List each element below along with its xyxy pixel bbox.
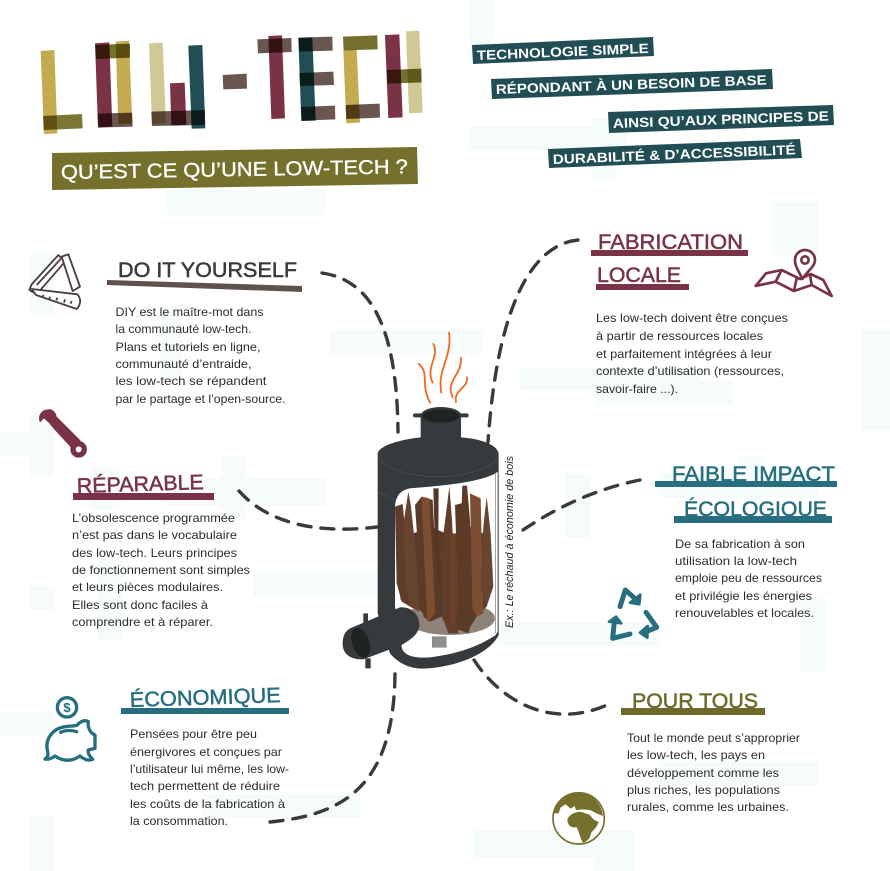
icon: map pin bbox=[756, 250, 832, 296]
text block: impact: renouvelables et locales. bbox=[675, 607, 814, 620]
text block: impact: utilisation la low-tech bbox=[675, 555, 797, 568]
stove body bbox=[378, 437, 499, 669]
stove illustration bbox=[343, 333, 499, 669]
text block: fabrication: Les low-tech doivent être conçues bbox=[596, 312, 788, 325]
text block: diy bbox=[116, 306, 286, 406]
text block: pour tous: Tout le monde peut s’approprier bbox=[627, 732, 800, 745]
text block: réparable: Elles sont donc faciles à bbox=[72, 599, 209, 612]
panel: fabrication locale: LOCALE bbox=[597, 264, 681, 287]
definition banners: RÉPONDANT À UN BESOIN DE BASE bbox=[496, 73, 767, 97]
panel: faible impact écologique: ÉCOLOGIQUE bbox=[684, 498, 827, 521]
icon: recycling bbox=[609, 590, 657, 638]
text block: pour tous: plus riches, les populations bbox=[627, 784, 780, 797]
text block: fabrication bbox=[596, 312, 788, 396]
title: LOW-TECH built from bars bbox=[41, 31, 423, 134]
icon: globe bbox=[553, 793, 604, 844]
text block: pour tous: développement comme les bbox=[627, 767, 779, 780]
text block: impact: et privilégie les énergies bbox=[675, 590, 812, 603]
definition banners bbox=[472, 37, 834, 168]
panel: pour tous: POUR TOUS bbox=[632, 690, 758, 713]
text block: impact: De sa fabrication à son bbox=[675, 538, 805, 551]
panel: fabrication locale: FABRICATION bbox=[598, 231, 743, 254]
text block: économique bbox=[130, 728, 289, 828]
panel: réparable bbox=[72, 471, 250, 629]
text block: fabrication: et parfaitement intégrées à leur bbox=[596, 348, 772, 361]
text block: économique: l’utilisateur lui même, les low- bbox=[130, 763, 289, 776]
icon: flames bbox=[419, 333, 467, 403]
text block: réparable: et leurs pièces modulaires. bbox=[72, 581, 223, 594]
panel: faible impact écologique bbox=[655, 463, 837, 620]
text block: impact bbox=[675, 538, 822, 620]
text block: pour tous: les low-tech, les pays en bbox=[627, 749, 765, 762]
burner plate bbox=[405, 602, 495, 635]
text block: réparable bbox=[72, 512, 250, 629]
caption: stove: Ex.: Le réchaud à économie de bois bbox=[504, 456, 516, 628]
text block: diy: les low-tech se répandent bbox=[116, 375, 267, 388]
text block: fabrication: savoir-faire ...). bbox=[596, 383, 678, 396]
dashed connectors bbox=[239, 240, 640, 822]
icon: tools bbox=[29, 254, 80, 309]
text block: réparable: L’obsolescence programmée bbox=[72, 512, 235, 525]
icon: piggy bank: $ bbox=[63, 700, 71, 715]
text block: diy: Plans et tutoriels en ligne, bbox=[116, 341, 260, 354]
definition banners: TECHNOLOGIE SIMPLE bbox=[476, 41, 649, 63]
text block: fabrication: contexte d’utilisation (ressources, bbox=[596, 365, 784, 378]
text block: réparable: des low-tech. Leurs principes bbox=[72, 547, 237, 560]
air intake tube bbox=[363, 613, 371, 668]
text block: pour tous: rurales, comme les urbaines. bbox=[627, 801, 789, 814]
icon: piggy bank bbox=[45, 698, 95, 760]
heading banner: qu'est ce qu'une low-tech: QU’EST CE QU’UNE LOW-TECH ? bbox=[61, 156, 408, 184]
text block: économique: énergivores et conçues par bbox=[130, 746, 282, 759]
icon: wrench bbox=[39, 409, 84, 455]
text block: réparable: de fonctionnement sont simples bbox=[72, 564, 250, 577]
panel: pour tous bbox=[621, 690, 800, 814]
wood logs bbox=[395, 486, 493, 633]
chimney bbox=[421, 415, 461, 456]
text block: impact: emploie peu de ressources bbox=[675, 572, 822, 585]
panel: do it yourself: DO IT YOURSELF bbox=[118, 259, 297, 282]
text block: économique: la consommation. bbox=[130, 815, 228, 828]
text block: diy: la communauté low-tech. bbox=[116, 323, 252, 336]
text block: diy: DIY est le maître-mot dans bbox=[116, 306, 264, 319]
text block: économique: les coûts de la fabrication à bbox=[130, 798, 286, 811]
text block: diy: communauté d’entraide, bbox=[116, 358, 252, 371]
text block: fabrication: à partir de ressources locales bbox=[596, 330, 763, 343]
panel: économique bbox=[121, 684, 289, 828]
definition banners: DURABILITÉ & D’ACCESSIBILITÉ bbox=[553, 142, 796, 167]
text block: diy: par le partage et l’open-source. bbox=[116, 393, 286, 406]
text block: réparable: comprendre et à réparer. bbox=[72, 616, 213, 629]
panel: économique: ÉCONOMIQUE bbox=[129, 684, 281, 712]
definition banners: AINSI QU’AUX PRINCIPES DE bbox=[613, 108, 829, 131]
panel: fabrication locale bbox=[591, 231, 788, 396]
panel: réparable: RÉPARABLE bbox=[76, 471, 204, 498]
heading banner: qu'est ce qu'une low-tech bbox=[52, 147, 418, 190]
text block: économique: tech permettent de réduire bbox=[130, 780, 280, 793]
panel: do it yourself bbox=[107, 259, 302, 406]
text block: pour tous bbox=[627, 732, 800, 814]
text block: réparable: n’est pas dans le vocabulaire bbox=[72, 529, 237, 542]
text block: économique: Pensées pour être peu bbox=[130, 728, 257, 741]
panel: faible impact écologique: FAIBLE IMPACT bbox=[672, 463, 835, 486]
